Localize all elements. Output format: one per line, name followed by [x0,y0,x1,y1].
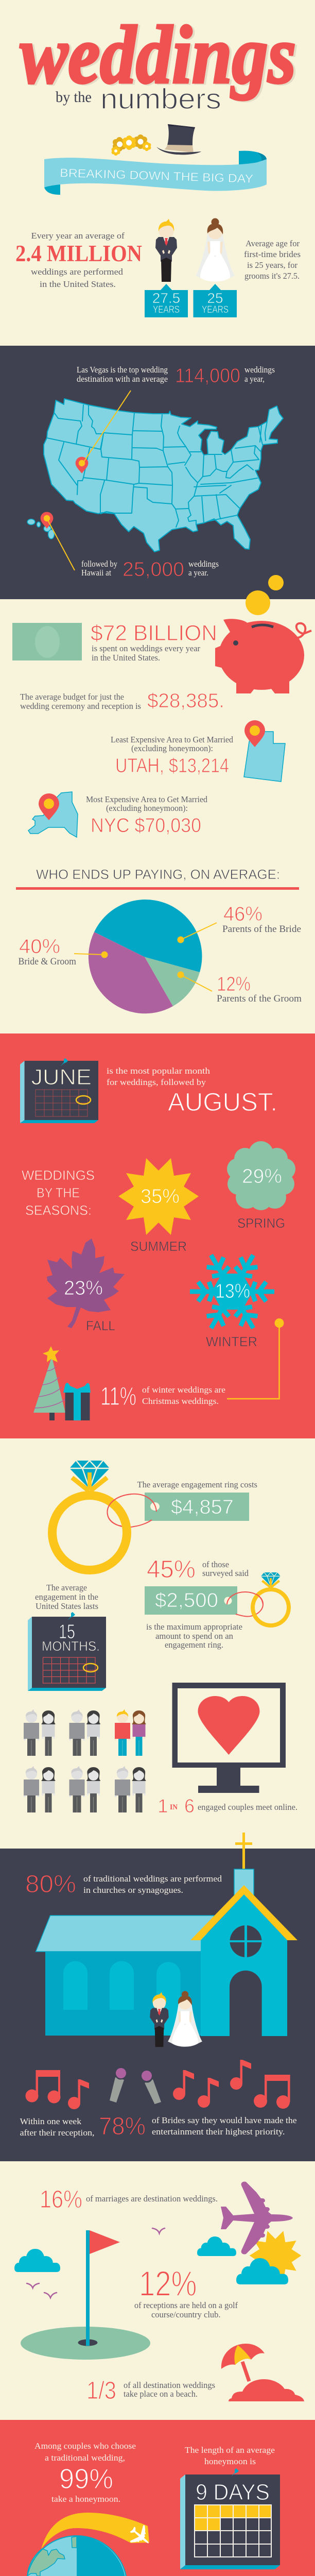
icon: cloud large [236,2258,288,2284]
text: 11% Christmas weddings: 11% [100,1382,136,1411]
heading: who ends up paying [16,867,299,890]
text: 16% destination weddings: of marriages are destination weddings. [86,2194,218,2204]
heading: who ends up paying: WHO ENDS UP PAYING, ON AVERAGE: [36,867,280,882]
map of the United States [44,399,283,552]
text: least expensive [111,735,233,777]
callout: parents of the groom 12%: Parents of the Groom [217,993,302,1004]
callout: parents of the groom 12% [177,972,302,1004]
text: 2.4 million weddings: in the United States. [40,279,116,289]
icon: winter snowflake 13%: WINTER [206,1334,257,1349]
text: 78% entertainment: after their reception, [20,2128,94,2138]
icons: music notes [26,2060,290,2109]
text: Las Vegas: a year, [244,374,265,384]
pie chart: who pays [89,900,202,1013]
age box: groom 27.5 years [145,284,188,317]
map: New York with pin [28,792,78,837]
text: Las Vegas: Las Vegas is the top wedding [77,365,168,375]
price tag: 2,500 [145,1586,263,1617]
icon: fall leaf 23%: FALL [86,1318,115,1333]
text: Las Vegas: destination with an average [77,374,168,384]
text: 12% golf receptions: of receptions are held on a golf [134,2300,238,2310]
calendar: 15 months: MONTHS. [42,1638,100,1654]
text: 72 billion [91,621,217,663]
text: 2.4 million weddings: Every year an average of [31,231,125,241]
illustration: bride [196,218,235,281]
icon: flight path swoosh [41,2513,149,2549]
text: 1 in 6 meet online: 6 [184,1795,195,1817]
text: 1 in 6 meet online: IN [170,1803,178,1811]
text: honeymoon length: honeymoon is [204,2456,256,2466]
background: dark church section [0,1849,315,2161]
text: 80% churches: of traditional weddings are performed [83,1874,222,1884]
calendar: June [20,1058,98,1123]
text: average engagement [35,1583,98,1611]
text: 99% take a honeymoon: Among couples who choose [34,2441,136,2451]
text: honeymoon length: The length of an average [185,2445,275,2455]
background: cream ring section [0,1438,315,1849]
text: most expensive: (excluding honeymoon): [106,803,188,813]
illustration: church groom [150,1992,169,2047]
connector: Las Vegas pin to text [84,391,131,462]
background: red honeymoon section [0,2420,315,2576]
text: June most popular, August: for weddings, followed by [107,1077,206,1087]
callout: parents of the bride 46% [177,903,301,943]
text: maximum appropriate: amount to spend on an [155,1631,233,1641]
text: average engagement: engagement in the [35,1592,98,1602]
illustration: church bride [168,1991,202,2047]
text: most expensive: NYC $70,030 [91,815,201,837]
text: 99% take a honeymoon: take a honeymoon. [51,2494,120,2504]
icon: sun behind clouds [250,2231,301,2280]
text: 45% surveyed: 45% [147,1556,196,1583]
text: 80% churches: in churches or synagogues. [83,1885,183,1895]
text: average budget: $28,385. [147,690,224,712]
text: Hawaii: 25,000 [122,558,184,581]
icon: spring flower 29%: 29% [242,1165,282,1188]
text: average ages: is 25 years, for [247,260,297,270]
calendar: 15 months: 15 [59,1621,75,1643]
icon: fall leaf 23%: 23% [64,1277,103,1299]
text: 1/3 beach: take place on a beach. [124,2389,198,2399]
text: 11% Christmas weddings [100,1382,225,1411]
callout: parents of the groom 12%: 12% [217,973,251,995]
text: 72 billion: is spent on weddings every year [92,643,200,653]
text: maximum appropriate: is the maximum appropriate [146,1622,242,1632]
age box: groom 27.5 years: YEARS [153,304,180,315]
background: red seasons section [0,1033,315,1438]
icon: coins [246,575,284,615]
text: 2.4 million weddings: 2.4 MILLION [15,241,142,266]
text: 99% take a honeymoon: 99% [59,2463,113,2495]
text: maximum appropriate [146,1622,242,1650]
ribbon banner: BREAKING DOWN THE BIG DAY [60,166,253,185]
text: 45% surveyed [147,1556,249,1583]
text: 78% entertainment: 78% [99,2113,146,2140]
calendar: 9 days [180,2468,280,2569]
text: least expensive: Least Expensive Area to Get Married [111,735,233,744]
icon: cloud left [14,2249,60,2272]
icon: winter snowflake 13% [190,1250,274,1349]
heading: weddings by the seasons: BY THE [37,1185,80,1200]
icon: white airplane [125,2521,155,2552]
heading: weddings by the seasons: SEASONS: [25,1202,92,1218]
text: 45% surveyed: surveyed said [202,1568,249,1578]
text: 72 billion: in the United States. [92,653,160,663]
text: most expensive [86,794,207,837]
text: 78% entertainment: Within one week [20,2116,82,2126]
price tag: 4,857 [107,1493,249,1527]
text: 78% entertainment [20,2113,297,2140]
background: cream money section [0,599,315,1033]
text: 12% golf receptions: course/country club. [151,2310,220,2319]
icon: beach umbrella [221,2344,304,2401]
text: Las Vegas: weddings [244,365,275,375]
text: 1/3 beach: 1/3 [86,2377,116,2404]
text: June most popular, August: AUGUST. [168,1088,277,1116]
text: 2.4 million weddings [15,231,142,289]
text: average ages: grooms it's 27.5. [244,271,300,281]
title: by the [56,89,92,106]
text: Hawaii: weddings [188,559,219,569]
callout: bride and groom 40%: 40% [19,936,60,958]
icon: golf green and flag [21,2230,150,2360]
ribbon banner [44,151,267,195]
icon: large diamond ring [52,1461,131,1570]
text: 45% surveyed: of those [202,1560,229,1569]
icon: summer sun 35%: SUMMER [130,1239,187,1254]
text: average engagement: United States lasts [36,1601,98,1611]
text: average ring cost: The average engagement ring costs [137,1480,257,1489]
icon: flowers [112,134,151,156]
age box: bride 25 years: 25 [207,290,223,306]
background: cream top section [0,0,315,346]
text: 80% churches [25,1871,222,1898]
text: 78% entertainment: entertainment their highest priority. [152,2127,285,2137]
connector: winter to Christmas [227,1318,284,1399]
illustration: groom [155,219,177,282]
text: 11% Christmas weddings: of winter weddings are [142,1385,225,1395]
text: 11% Christmas weddings: Christmas weddings. [142,1396,219,1406]
text: average ages: Average age for [246,239,300,248]
text: 1 in 6 meet online: 1 [157,1795,168,1817]
text: 12% golf receptions: 12% [139,2264,197,2303]
text: 1 in 6 meet online: engaged couples meet online. [198,1802,297,1812]
text: average engagement: The average [46,1583,87,1592]
text: 80% churches: 80% [25,1871,76,1898]
text: average ages [244,239,301,281]
text: Las Vegas: 114,000 [175,365,240,387]
text: honeymoon length [185,2445,275,2466]
text: most expensive: Most Expensive Area to Get Married [86,794,207,804]
icon: Christmas tree [33,1346,65,1420]
text: least expensive: (excluding honeymoon): [131,743,213,753]
text: maximum appropriate: engagement ring. [165,1640,223,1650]
pin and connector: Hawaii [41,512,75,570]
text: least expensive: UTAH, $13,214 [115,755,229,777]
calendar: 9 days: 9 DAYS [196,2480,270,2505]
icon: winter snowflake 13%: 13% [215,1280,250,1302]
text: average budget: The average budget for just the [20,692,124,702]
background: cream destination section [0,2161,315,2420]
text: 99% take a honeymoon [34,2441,136,2504]
text: June most popular, August [107,1066,277,1116]
text: 16% destination weddings: 16% [40,2186,82,2213]
callout: bride and groom 40% [19,936,108,967]
text: average budget [20,690,224,712]
text: 78% entertainment: of Brides say they would have made the [152,2115,296,2125]
text: Hawaii: a year. [188,568,208,578]
icon: airplane [221,2181,293,2255]
callout: bride and groom 40%: Bride & Groom [19,956,76,967]
title: numbers [100,82,221,115]
chart: globe honeymoon pie [26,2536,127,2576]
text: average ages: first-time brides [244,249,301,259]
age box: bride 25 years [194,284,237,317]
age box: bride 25 years: YEARS [202,304,229,315]
text: June most popular, August: is the most popular month [107,1066,211,1076]
icon: fall leaf 23% [47,1239,125,1333]
text: 1 in 6 meet online [157,1795,297,1817]
text: average budget: wedding ceremony and reception is [20,701,141,711]
icon: gift box [63,1383,91,1420]
text: Hawaii: Hawaii at [81,568,111,578]
text: Las Vegas [77,365,275,387]
icon: couples, 1 in 6 highlighted [24,1709,146,1812]
callout: parents of the bride 46%: Parents of the Bride [222,924,301,935]
text: 2.4 million weddings: weddings are performed [31,267,124,277]
age box: groom 27.5 years: 27.5 [152,290,180,306]
icon: spring flower 29% [227,1141,295,1231]
text: 1/3 beach [86,2377,215,2404]
icon: top hat [156,124,201,155]
callout: parents of the bride 46%: 46% [223,903,262,925]
icon: computer monitor with heart [172,1683,286,1793]
text: Hawaii: followed by [81,559,117,569]
icon: summer sun 35%: 35% [141,1185,180,1208]
calendar: 15 months [28,1612,106,1691]
heading: weddings by the seasons [22,1167,95,1218]
icon: summer sun 35% [118,1158,199,1254]
icon: small diamond ring [253,1572,289,1625]
text: 99% take a honeymoon: a traditional wedding, [45,2453,125,2463]
icon: microphones [110,2068,161,2104]
background: dark map section [0,346,315,599]
map: Utah with pin [244,720,285,782]
price tag: 2,500: $2,500 [155,1589,218,1612]
text: Hawaii [81,558,219,581]
icon: dollar bill [12,623,82,660]
icon: piggy bank [215,619,311,693]
price tag: 4,857: $4,857 [171,1496,234,1518]
icons: birds [27,2228,165,2298]
text: 16% destination weddings [40,2186,218,2213]
map of Hawaii [27,519,55,539]
heading: weddings by the seasons: WEDDINGS [22,1167,95,1183]
icon: spring flower 29%: SPRING [237,1215,285,1231]
text: 12% golf receptions [134,2264,238,2319]
icon: cloud small [197,2236,236,2256]
illustration: church [36,1833,297,2036]
pin: Las Vegas [76,457,88,473]
text: 72 billion: $72 BILLION [91,621,217,646]
calendar: June: JUNE [31,1065,92,1090]
text: 1/3 beach: of all destination weddings [124,2380,215,2390]
